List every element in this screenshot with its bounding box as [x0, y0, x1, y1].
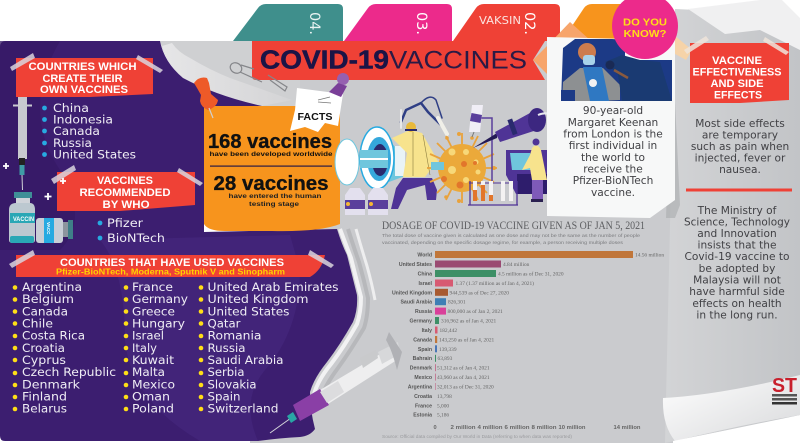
photo — [561, 39, 672, 101]
heading: vaccines recommended by WHO: RECOMMENDED — [80, 187, 170, 199]
value labels: 139,339 — [439, 347, 457, 353]
vial on stand — [478, 118, 492, 188]
list column 2: Kuwait — [132, 353, 174, 367]
country labels: Italy — [422, 328, 432, 334]
axis labels: 4 million — [478, 425, 503, 431]
country labels: Croatia — [414, 394, 432, 400]
tape strips beside card — [668, 30, 692, 60]
heading: vaccine effectiveness: AND SIDE — [710, 78, 764, 90]
country labels: Bahrain — [413, 356, 432, 362]
title banner: VACCINES — [389, 46, 527, 74]
tab 03 — [344, 4, 452, 41]
country labels: World — [417, 252, 432, 258]
needle and injector — [473, 133, 497, 148]
tab 02: VAKSIN — [479, 15, 521, 27]
text: ministry statement: Science, Technology — [684, 216, 790, 228]
axis labels: 0 — [433, 425, 437, 431]
purple panel — [0, 41, 375, 441]
page curl bottom right — [663, 375, 800, 443]
heading: vaccines recommended by WHO — [51, 165, 203, 211]
list column 1: Cyprus — [22, 353, 66, 367]
heading: countries that have used vaccines: COUNTRIES THAT HAVE USED VACCINES — [60, 257, 284, 269]
country labels — [392, 252, 433, 419]
list column 3: Romania — [208, 328, 262, 342]
list column 3: United States — [208, 304, 290, 318]
list column 2: Malta — [132, 365, 165, 379]
value labels: 14.56 million — [635, 252, 664, 258]
panel: facts: have been developed worldwide — [210, 151, 333, 158]
heading: vaccines recommended by WHO: BY WHO — [102, 199, 150, 211]
list column 3: Slovakia — [208, 378, 256, 392]
text: side effects — [691, 118, 789, 176]
text: ministry statement: be adopted by — [699, 263, 775, 275]
right grey panel — [665, 0, 800, 443]
panel: did you know photo card: Margaret Keenan — [568, 117, 658, 129]
list column 3: United Kingdom — [208, 292, 308, 306]
syringe left — [13, 97, 32, 190]
list column 3: Saudi Arabia — [208, 353, 284, 367]
test tube rack — [468, 181, 518, 205]
value labels — [437, 252, 664, 419]
panel: did you know photo card: receive the — [583, 164, 643, 176]
panel: facts: have entered the human — [228, 193, 322, 200]
value labels: 944,539 as of Dec 27, 2020 — [450, 289, 509, 296]
sparkles — [3, 163, 66, 200]
scientist left legs — [391, 178, 437, 209]
gloved hand — [431, 162, 444, 170]
tab 04 — [233, 4, 343, 41]
country labels: United States — [399, 262, 432, 268]
country labels: Denmark — [410, 366, 432, 372]
country labels: Israel — [418, 281, 433, 287]
panel: did you know photo card: vaccine. — [591, 187, 635, 199]
text: ministry statement — [684, 205, 790, 322]
country labels: Estonia — [413, 413, 432, 419]
icon: vaccine vials: VACCIN — [13, 216, 34, 223]
left disc — [335, 139, 359, 185]
chart subtitle: The total dose of vaccine given is calculated as one dose and may not be the same as the number of people — [382, 233, 640, 239]
value labels: 4.5 million as of Dec 31, 2020 — [498, 270, 564, 278]
text: ministry statement: and Innovation — [697, 228, 777, 240]
heading: countries that have used vaccines: Pfizer-BioNTech, Moderna, Sputnik V and Sinopharm — [56, 268, 285, 276]
chart subtitle — [382, 233, 640, 246]
value labels: 32,013 as of Dec 31, 2020 — [437, 384, 494, 390]
list column 2 — [124, 280, 188, 416]
tab 04: 04. — [306, 12, 322, 35]
list column 1: Finland — [22, 390, 67, 404]
value labels: 13,798 — [437, 394, 452, 400]
icon: syringe bottom — [270, 332, 402, 433]
list column 3: Switzerland — [208, 402, 278, 416]
facts note — [290, 88, 343, 132]
tab 01 — [562, 4, 640, 41]
title banner — [252, 22, 590, 80]
scientist right — [522, 145, 547, 180]
list column 2: Israel — [132, 328, 164, 342]
axis labels: 10 million — [558, 425, 586, 431]
heading: countries that have used vaccines — [9, 250, 334, 277]
list: vaccine makers: Canada — [53, 124, 100, 138]
list: vaccine makers: United States — [53, 148, 136, 162]
text: ministry statement: in the long run. — [696, 310, 778, 322]
heading: countries which create their own vaccines: OWN VACCINES — [40, 84, 128, 96]
country labels: France — [415, 403, 432, 409]
folded grey paper curve — [160, 41, 300, 110]
country labels: Russia — [415, 309, 432, 315]
text: side effects: are temporary — [702, 130, 778, 142]
list: WHO vaccines — [98, 216, 165, 245]
heading: vaccines recommended by WHO: VACCINES — [97, 175, 153, 187]
list column 1: Chile — [22, 316, 53, 330]
text: ministry statement: insists that the — [698, 240, 776, 252]
panel: did you know photo card: the world to — [581, 152, 645, 164]
axis labels: 8 million — [532, 425, 557, 431]
value labels: 1.37 (1.37 million as of Jan 4, 2021) — [456, 280, 534, 287]
value labels: 5,000 — [437, 403, 449, 409]
list column 1 — [13, 280, 116, 416]
list column 2: Italy — [132, 341, 157, 355]
heading: countries which create their own vaccines: CREATE THEIR — [42, 73, 122, 85]
scientist left coat — [392, 130, 439, 177]
heading: vaccine effectiveness: VACCINE — [712, 55, 762, 67]
illustration: lab machine and scientists — [335, 97, 557, 215]
callout: do you know: DO YOU — [623, 16, 667, 28]
list: vaccine makers — [42, 101, 136, 162]
panel: did you know photo card: from London is the — [563, 128, 663, 140]
list column 3: Qatar — [208, 316, 241, 330]
bars — [435, 251, 633, 390]
list column 1: Costa Rica — [22, 328, 85, 342]
outer ring — [360, 127, 394, 189]
list column 2: Poland — [132, 402, 174, 416]
tab 02: 02. — [521, 12, 537, 35]
tab 02 — [453, 4, 560, 41]
text: side effects: such as pain when — [691, 141, 789, 153]
list: vaccine makers: China — [53, 101, 89, 115]
country labels: United Kingdom — [392, 290, 432, 296]
text: side effects: injected, fever or — [695, 152, 786, 164]
fold shadow beside note — [666, 40, 680, 218]
list column 3 — [199, 280, 338, 416]
value labels: 143,250 as of Jan 4, 2021 — [439, 336, 495, 343]
facts note: FACTS — [298, 112, 333, 123]
console — [506, 150, 555, 194]
text: ministry statement: Malaysia will not — [693, 274, 781, 286]
heading: vaccine effectiveness — [684, 36, 789, 103]
list column 1: Czech Republic — [22, 365, 116, 379]
list column 2: Hungary — [132, 316, 185, 330]
panel: did you know photo card: Pfizer-BioNTech — [573, 175, 653, 187]
vials — [345, 188, 388, 215]
value labels: 51,312 as of Jan 4, 2021 — [437, 365, 490, 372]
list column 2: France — [132, 280, 173, 294]
text: side effects: Most side effects — [695, 118, 785, 130]
panel: facts: 28 vaccines — [214, 173, 328, 195]
country labels: China — [418, 272, 432, 278]
value labels: 43,960 as of Jan 4, 2021 — [437, 374, 490, 381]
icon: purple push pin — [329, 73, 349, 97]
list column 2: Germany — [132, 292, 188, 306]
list column 2: Mexico — [132, 378, 175, 392]
panel: facts: 168 vaccines — [208, 131, 332, 153]
panel: did you know photo card: first individual in — [569, 140, 657, 152]
country labels: Canada — [413, 337, 432, 343]
heading: countries which create their own vaccines — [10, 53, 163, 97]
panel: did you know photo card: 90-year-old — [583, 105, 643, 117]
value labels: 800,000 as of Jan 2, 2021 — [448, 308, 503, 315]
country labels: Mexico — [414, 375, 432, 381]
list column 2: Greece — [132, 304, 175, 318]
value labels: 5,186 — [437, 413, 449, 419]
source: Source: Official data compiled by Our World in Data (referring to when data was reported) — [382, 434, 573, 439]
text: side effects: nausea. — [719, 164, 761, 176]
list column 2: Oman — [132, 390, 170, 404]
list column 3: Spain — [208, 390, 240, 404]
callout: do you know — [612, 0, 678, 59]
list: WHO vaccines: BioNTech — [107, 231, 165, 245]
list column 1: Belgium — [22, 292, 74, 306]
injector cylinder — [389, 141, 405, 182]
text: ministry statement: Covid-19 vaccine to — [684, 251, 790, 263]
virus — [427, 133, 497, 203]
country labels: Spain — [418, 347, 432, 353]
heading: countries which create their own vaccines: COUNTRIES WHICH — [28, 61, 136, 73]
grey centre sheet — [160, 41, 680, 443]
axis labels: 14 million — [614, 425, 641, 431]
list: WHO vaccines: Pfizer — [107, 216, 143, 230]
tab 03: 03. — [413, 12, 429, 35]
heading: vaccine effectiveness: EFFECTS — [714, 90, 762, 102]
chart title: DOSAGE OF COVID-19 VACCINE GIVEN AS OF JAN 5, 2021 — [382, 218, 645, 232]
list: vaccine makers: Indonesia — [53, 112, 113, 126]
icon: safety pin — [228, 61, 287, 91]
axis labels — [433, 425, 641, 431]
text: ministry statement: effects on health — [692, 298, 782, 310]
icon: orange push pin — [194, 78, 218, 118]
logo: ST: ST — [772, 375, 797, 397]
text: ministry statement: have harmful side — [689, 286, 785, 298]
list column 1: Argentina — [22, 280, 82, 294]
value labels: 4.84 million — [503, 262, 530, 268]
country labels: Germany — [410, 318, 432, 324]
country labels: Argentina — [408, 384, 432, 390]
list column 3: United Arab Emirates — [208, 280, 338, 294]
list column 3: Russia — [208, 341, 246, 355]
list column 3: Serbia — [208, 365, 244, 379]
value labels: 182,442 — [440, 328, 457, 334]
value labels: 316,962 as of Jan 4, 2021 — [441, 318, 497, 324]
title banner: COVID-19 — [260, 46, 389, 74]
icon: vaccine vials — [9, 192, 73, 243]
bar chart: vaccine dosage — [382, 218, 664, 439]
value labels: 826,301 — [448, 300, 466, 306]
axis labels: 6 million — [504, 425, 530, 431]
list column 1: Canada — [22, 304, 68, 318]
country labels: Saudi Arabia — [400, 300, 432, 306]
list column 1: Croatia — [22, 341, 65, 355]
callout: do you know: KNOW? — [624, 28, 666, 40]
axis labels: 2 million — [450, 425, 476, 431]
list column 1: Belarus — [22, 402, 67, 416]
heading: vaccine effectiveness: EFFECTIVENESS — [692, 66, 782, 78]
value labels: 63,893 — [438, 356, 453, 362]
chart subtitle: vaccinated, depending on the specific dosage regime, for example, a person receiving multiple doses — [382, 240, 624, 246]
robot arm — [401, 97, 447, 134]
panel: facts: testing stage — [249, 201, 299, 208]
panel: facts — [204, 106, 340, 231]
text: ministry statement: The Ministry of — [697, 205, 777, 217]
list: vaccine makers: Russia — [53, 136, 92, 150]
icon: vaccine vials: VACC — [46, 222, 51, 235]
panel: did you know photo card — [547, 37, 675, 218]
list column 1: Denmark — [22, 378, 80, 392]
